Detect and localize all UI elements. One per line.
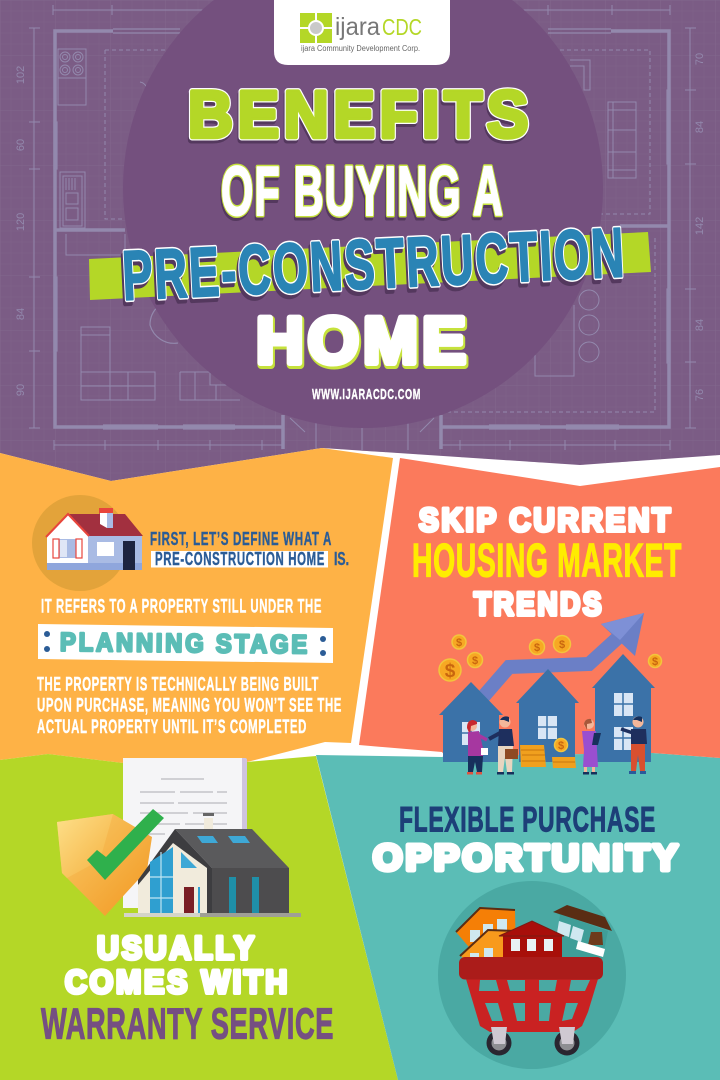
icon: coins: [439, 635, 662, 752]
icon: people in housing scene: [467, 716, 647, 774]
coin symbols: $: [559, 639, 565, 651]
planning stage banner: PLANNING STAGE: [60, 627, 310, 659]
website url: WWW.IJARACDC.COM: [312, 386, 421, 403]
logo card: [274, 0, 450, 65]
intro text: [150, 529, 349, 569]
logo card: CDC: [382, 14, 422, 40]
woman shaking hands: [467, 720, 488, 774]
intro text: FIRST, LET’S DEFINE WHAT A: [150, 529, 332, 549]
blueprint dimension numbers: 60: [15, 139, 27, 151]
coin symbols: $: [445, 661, 456, 682]
blueprint dimension numbers: 76: [694, 389, 706, 401]
intro text: IS.: [334, 549, 349, 569]
coin symbols: $: [534, 642, 540, 654]
blueprint dimension numbers: 102: [15, 66, 27, 84]
explanation text: THE PROPERTY IS TECHNICALLY BEING BUILT: [37, 674, 319, 696]
basket wheels: [486, 1030, 512, 1056]
logo card: ijara Community Development Corp.: [301, 44, 420, 53]
title: of buying a: OF BUYING A: [221, 152, 504, 230]
panel: flexible purchase opportunity: [316, 753, 720, 1080]
woman with tablet: [582, 719, 601, 774]
title backdrop circle: [123, 0, 603, 428]
icon: contract document: [123, 758, 247, 908]
icon: shield: [57, 814, 152, 916]
title: home: HOME: [257, 305, 471, 379]
heading: SKIP CURRENT: [419, 502, 673, 538]
coin symbols: $: [456, 637, 462, 649]
coin symbols: $: [558, 740, 564, 752]
orange houses: [456, 907, 516, 960]
icon: check mark: [87, 809, 164, 880]
red house: [503, 935, 562, 960]
icon: modern house: [124, 813, 301, 917]
panel: warranty service: [0, 754, 398, 1080]
coin symbols: $: [472, 655, 478, 667]
heading: [373, 800, 681, 878]
heading: [412, 502, 682, 622]
blueprint dimension numbers: 84: [694, 319, 706, 331]
heading: WARRANTY SERVICE: [41, 1000, 334, 1048]
explanation text: ACTUAL PROPERTY UNTIL IT’S COMPLETED: [37, 717, 307, 738]
intro text: PRE-CONSTRUCTION HOME: [155, 549, 325, 569]
teal house: [552, 905, 612, 960]
blueprint dimension numbers: [15, 53, 706, 401]
icon: growth arrow: [483, 613, 644, 697]
coin symbols: $: [652, 656, 658, 668]
lime highlight bar: [89, 232, 651, 300]
explanation text: UPON PURCHASE, MEANING YOU WON’T SEE THE: [37, 696, 342, 716]
heading: USUALLY: [97, 930, 257, 966]
icon: shopping basket of houses: [438, 881, 626, 1069]
blueprint dimension numbers: 120: [15, 213, 27, 231]
basket rim: [459, 957, 603, 980]
icon: house: [32, 495, 143, 591]
man with briefcase: [489, 716, 518, 774]
blueprint dimension numbers: 142: [694, 217, 706, 235]
title: home: HOME: [256, 303, 470, 377]
definition line: IT REFERS TO A PROPERTY STILL UNDER THE: [41, 596, 322, 618]
heading: TRENDS: [474, 586, 604, 622]
logo card: ijara: [335, 13, 380, 41]
heading: [41, 930, 334, 1048]
man gesturing: [621, 716, 647, 774]
panel: skip current housing market trends: [359, 458, 720, 768]
icon: coin stacks: [520, 745, 576, 768]
blueprint dimension numbers: 70: [694, 53, 706, 65]
title: Benefits: BENEFITS: [187, 80, 532, 154]
title: of buying a: OF BUYING A: [221, 152, 504, 230]
title: Benefits: BENEFITS: [188, 77, 533, 151]
icon: logo mark: [300, 13, 332, 43]
explanation text: [37, 674, 342, 738]
blueprint dimension numbers: 84: [694, 121, 706, 133]
blueprint dimension numbers: 90: [15, 384, 27, 396]
basket body: [466, 979, 598, 1032]
heading: COMES WITH: [65, 964, 290, 1000]
title: of buying a: OF BUYING A: [220, 155, 503, 233]
title: Benefits: BENEFITS: [188, 77, 533, 151]
heading: OPPORTUNITY: [373, 837, 681, 878]
icon: three houses: [439, 654, 655, 762]
title: of buying a: [220, 152, 504, 233]
blueprint header background: [0, 0, 720, 481]
panel: definition: [0, 448, 393, 763]
coin symbols: [445, 637, 658, 752]
blueprint dimension numbers: 84: [15, 308, 27, 320]
